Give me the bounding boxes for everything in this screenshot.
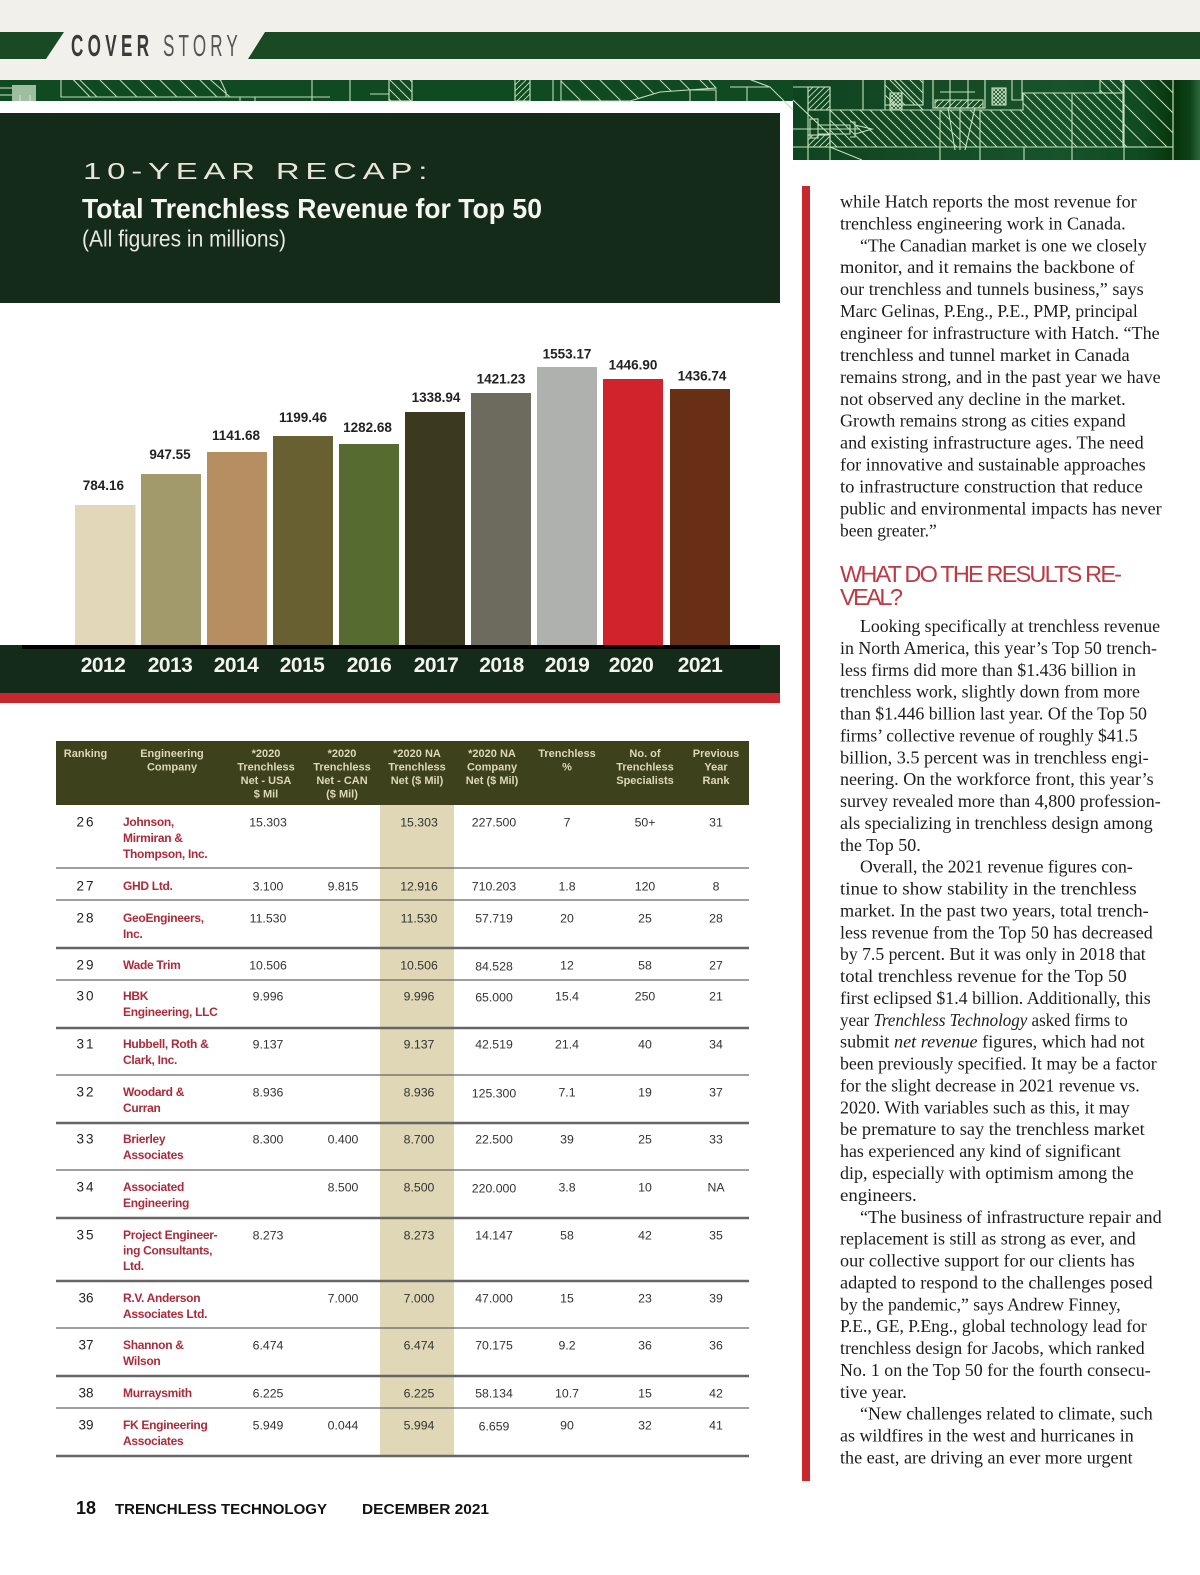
- row 27: 8: [713, 880, 720, 894]
- row 38: 6.225: [404, 1386, 435, 1400]
- section heading: [840, 561, 1122, 610]
- article text: results: in North America, this year’s Top 50 trench-: [840, 638, 1157, 658]
- row 35: Ltd.: [123, 1259, 144, 1273]
- article text: opening paragraphs: for innovative and sustainable approaches: [840, 455, 1146, 475]
- row 28: GeoEngineers,: [123, 911, 204, 925]
- row 38: 6.225: [253, 1386, 284, 1400]
- row 26: 15.303: [400, 816, 438, 830]
- row 33: 33: [709, 1132, 723, 1146]
- row 39: 0.044: [328, 1418, 359, 1432]
- table header: Net - USA: [241, 775, 291, 787]
- article text: results: No. 1 on the Top 50 for the fourth consecu-: [840, 1360, 1151, 1380]
- row 31: 9.137: [253, 1038, 284, 1052]
- row 38: 58.134: [475, 1386, 513, 1400]
- article text: results: our collective support for our clients has: [840, 1250, 1135, 1270]
- table header: *2020: [252, 748, 280, 760]
- value labels: 947.55: [149, 447, 191, 462]
- row 26: Mirmiran &: [123, 831, 183, 845]
- article text: results: Overall, the 2021 revenue figures con-: [860, 857, 1133, 877]
- row 35: 35: [709, 1228, 723, 1242]
- blueprint graphic: [0, 70, 1200, 160]
- panel title: Total Trenchless Revenue for Top 50: [82, 193, 542, 224]
- table header: Trenchless: [237, 761, 295, 773]
- article text: results: less firms did more than $1.436 billion in: [840, 660, 1136, 680]
- row 30: 9.996: [253, 990, 284, 1004]
- row 27: 9.815: [328, 880, 359, 894]
- article text: opening paragraphs: Marc Gelinas, P.Eng., P.E., PMP, principal: [840, 301, 1138, 321]
- row 29: 12: [560, 958, 574, 972]
- row 29: 10.506: [400, 958, 438, 972]
- value labels: 1199.46: [279, 410, 328, 425]
- row 30: 15.4: [555, 990, 579, 1004]
- row 35: [76, 1228, 723, 1273]
- row 32: Woodard &: [123, 1085, 185, 1099]
- table header: Trenchless: [388, 761, 446, 773]
- row 28: 28: [709, 912, 723, 926]
- row 34: 8.500: [328, 1180, 359, 1194]
- section banner: cover story: COVER: [71, 29, 149, 63]
- row rules: [56, 868, 749, 1456]
- table header: Trenchless: [313, 761, 371, 773]
- row 35: 58: [560, 1228, 574, 1242]
- row 36: 7.000: [404, 1292, 435, 1306]
- article text: opening paragraphs: monitor, and it remains the backbone of: [840, 257, 1135, 277]
- row 30: 21: [709, 990, 723, 1004]
- row 33: 8.300: [253, 1132, 284, 1146]
- article text: opening paragraphs: remains strong, and in the past year we have: [840, 367, 1161, 387]
- row 37: 36: [638, 1338, 652, 1352]
- table header: $ Mil: [254, 788, 278, 800]
- row 39: 6.659: [479, 1420, 510, 1434]
- panel subtitle: (All figures in millions): [82, 226, 286, 252]
- year labels: 2015: [280, 654, 325, 677]
- row 34: 34: [76, 1180, 96, 1194]
- row 33: [76, 1132, 723, 1162]
- year labels: 2013: [148, 654, 192, 677]
- article text: results: tinue to show stability in the trenchless: [840, 879, 1137, 899]
- row 30: HBK: [123, 989, 149, 1003]
- row 39: FK Engineering: [123, 1418, 207, 1432]
- row 33: Brierley: [123, 1132, 166, 1146]
- footer: TRENCHLESS TECHNOLOGY: [115, 1502, 327, 1518]
- row 31: 31: [76, 1036, 96, 1052]
- row 33: 39: [560, 1132, 574, 1146]
- rankings table: [56, 741, 749, 1456]
- value labels: [83, 346, 727, 493]
- bars: [75, 367, 730, 645]
- article text: results: than $1.446 billion last year. Of the Top 50: [840, 704, 1147, 724]
- axis band: [0, 645, 780, 693]
- row 35: 14.147: [475, 1228, 513, 1242]
- article text: opening paragraphs: public and environmental impacts has never: [840, 498, 1162, 518]
- table header: Net ($ Mil): [466, 775, 519, 787]
- article text: opening paragraphs: not observed any decline in the market.: [840, 389, 1126, 409]
- row 36: 39: [709, 1292, 723, 1306]
- section banner: cover story: STORY: [163, 29, 238, 63]
- row 32: Curran: [123, 1101, 161, 1115]
- row 38: [78, 1386, 723, 1400]
- article text: opening paragraphs: trenchless and tunnel market in Canada: [840, 345, 1130, 365]
- article text: results: total trenchless revenue for the Top 50: [840, 966, 1127, 986]
- article text: opening paragraphs: [840, 191, 1162, 540]
- row 32: 125.300: [472, 1086, 516, 1100]
- row 31: 42.519: [475, 1038, 513, 1052]
- article text: results: “The business of infrastructure repair and: [860, 1207, 1162, 1227]
- row 37: 6.474: [253, 1338, 284, 1352]
- table header: Previous: [693, 748, 739, 760]
- row 30: 250: [635, 990, 655, 1004]
- footer: DECEMBER 2021: [362, 1502, 489, 1518]
- article text: results: market. In the past two years, total trench-: [840, 900, 1149, 920]
- article text: results: neering. On the workforce front, this year’s: [840, 769, 1154, 789]
- article text: opening paragraphs: our trenchless and tunnels business,” says: [840, 279, 1144, 299]
- title panel: [0, 113, 780, 303]
- row 27: [76, 878, 720, 894]
- row 35: 42: [638, 1228, 652, 1242]
- row 36: 36: [78, 1290, 94, 1306]
- row 36: 23: [638, 1292, 652, 1306]
- row 27: GHD Ltd.: [123, 879, 173, 893]
- row 30: 30: [76, 988, 96, 1004]
- article text: results: P.E., GE, P.Eng., global technology lead for: [840, 1316, 1147, 1336]
- row 33: 8.700: [404, 1132, 435, 1146]
- row 27: 1.8: [558, 880, 576, 894]
- row 28: 57.719: [475, 912, 513, 926]
- article text: results: for the slight decrease in 2021 revenue vs.: [840, 1076, 1140, 1096]
- row 36: R.V. Anderson: [123, 1291, 200, 1305]
- row 39: 5.994: [404, 1418, 435, 1432]
- section heading: WHAT DO THE RESULTS RE-: [840, 561, 1122, 587]
- value labels: 1282.68: [343, 420, 392, 435]
- table header: Year: [704, 761, 728, 773]
- row 37: 6.474: [404, 1338, 435, 1352]
- row 27: 710.203: [472, 880, 516, 894]
- row 37: Shannon &: [123, 1338, 184, 1352]
- value labels: 1421.23: [477, 372, 526, 386]
- row 35: ing Consultants,: [123, 1243, 212, 1257]
- article text: results: less revenue from the Top 50 has decreased: [840, 922, 1153, 942]
- row 29: 58: [638, 958, 652, 972]
- table header: %: [562, 761, 572, 773]
- article text: results: by the pandemic,” says Andrew Finney,: [840, 1294, 1121, 1314]
- footer: 18: [76, 1498, 96, 1518]
- red column rule: [802, 186, 810, 1481]
- value labels: 1553.17: [543, 346, 591, 362]
- table header: Ranking: [64, 748, 107, 760]
- row 28: 20: [560, 912, 574, 926]
- article text: results: year Trenchless Technology asked firms to: [840, 1010, 1128, 1030]
- year labels: [81, 654, 723, 677]
- row 39: 39: [78, 1418, 94, 1432]
- row 35: 35: [76, 1228, 96, 1242]
- row 28: [76, 910, 723, 941]
- row 31: Clark, Inc.: [123, 1053, 177, 1067]
- row 32: 8.936: [404, 1086, 435, 1100]
- article text: results: firms’ collective revenue of roughly $41.5: [840, 725, 1138, 745]
- year labels: 2012: [81, 654, 125, 677]
- article text: results: submit net revenue figures, which had not: [840, 1032, 1145, 1052]
- article text: results: Looking specifically at trenchless revenue: [860, 616, 1160, 636]
- article text: opening paragraphs: engineer for infrastructure with Hatch. “The: [840, 323, 1160, 343]
- row 34: NA: [707, 1180, 725, 1194]
- row 32: 8.936: [253, 1086, 284, 1100]
- section banner: cover story: [0, 29, 1200, 63]
- row 28: 25: [638, 912, 652, 926]
- row 39: Associates: [123, 1434, 184, 1448]
- row 36: 7.000: [328, 1292, 359, 1306]
- article text: opening paragraphs: to infrastructure construction that reduce: [840, 477, 1143, 497]
- article text: opening paragraphs: trenchless engineering work in Canada.: [840, 213, 1126, 233]
- article text: results: trenchless work, slightly down from more: [840, 682, 1140, 702]
- row 26: 50+: [635, 816, 655, 830]
- row 39: 5.949: [253, 1418, 284, 1432]
- year labels: 2017: [414, 654, 458, 677]
- table header: Engineering: [140, 748, 204, 760]
- row 37: 9.2: [558, 1338, 576, 1352]
- article text: opening paragraphs: “The Canadian market is one we closely: [860, 235, 1147, 255]
- row 36: Associates Ltd.: [123, 1307, 207, 1321]
- article text: results: the east, are driving an ever more urgent: [840, 1447, 1133, 1467]
- row 35: 8.273: [253, 1228, 284, 1242]
- row 37: [78, 1338, 723, 1368]
- row 38: Murraysmith: [123, 1386, 192, 1400]
- row 34: Engineering: [123, 1196, 189, 1210]
- row 36: 47.000: [475, 1292, 513, 1306]
- article text: results: the Top 50.: [840, 835, 921, 855]
- row 28: 28: [76, 910, 96, 926]
- table header: *2020: [328, 748, 356, 760]
- value labels: 1338.94: [412, 390, 461, 405]
- article text: results: been previously specified. It may be a factor: [840, 1054, 1157, 1074]
- table header: Net ($ Mil): [391, 775, 444, 787]
- row 36: [78, 1290, 723, 1321]
- table header: Trenchless: [538, 748, 596, 760]
- row 26: 15.303: [249, 816, 287, 830]
- table header: No. of: [629, 748, 661, 760]
- row 26: 26: [76, 814, 96, 830]
- highlighted column: [380, 805, 454, 1456]
- row 39: 41: [709, 1418, 723, 1432]
- row 34: Associated: [123, 1180, 184, 1194]
- article text: results: by 7.5 percent. But it was only in 2018 that: [840, 944, 1146, 964]
- row 31: Hubbell, Roth &: [123, 1037, 209, 1051]
- row 33: 22.500: [475, 1132, 513, 1146]
- row 39: 32: [638, 1418, 652, 1432]
- row 29: 10.506: [249, 958, 287, 972]
- row 27: 120: [635, 880, 655, 894]
- row 33: 25: [638, 1132, 652, 1146]
- row 38: 42: [709, 1386, 723, 1400]
- article text: results: “New challenges related to climate, such: [860, 1404, 1153, 1424]
- table header: Company: [147, 761, 198, 773]
- row 27: 27: [76, 878, 96, 894]
- article text: results: as wildfires in the west and hurricanes in: [840, 1426, 1134, 1446]
- value labels: 1141.68: [212, 428, 261, 443]
- row 30: [76, 988, 723, 1019]
- article text: results: als specializing in trenchless design among: [840, 813, 1153, 833]
- row 28: 11.530: [401, 912, 438, 926]
- year labels: 2021: [678, 654, 723, 677]
- row 33: Associates: [123, 1148, 184, 1162]
- article text: results: adapted to respond to the challenges posed: [840, 1272, 1153, 1292]
- article text: results: replacement is still as strong as ever, and: [840, 1229, 1136, 1249]
- row 29: [76, 958, 723, 974]
- row 28: Inc.: [123, 927, 142, 941]
- table header: Trenchless: [616, 761, 674, 773]
- row 38: 10.7: [555, 1386, 579, 1400]
- row 28: 11.530: [250, 912, 287, 926]
- year labels: 2014: [214, 654, 259, 677]
- article text: results: first eclipsed $1.4 billion. Additionally, this: [840, 988, 1151, 1008]
- article text: results: billion, 3.5 percent was in trenchless engi-: [840, 747, 1149, 767]
- value labels: 1446.90: [609, 358, 657, 372]
- row 37: 37: [78, 1338, 94, 1352]
- year labels: 2018: [479, 654, 525, 677]
- row 29: 27: [709, 958, 723, 972]
- row 37: 36: [709, 1338, 723, 1352]
- row 32: 7.1: [558, 1086, 576, 1100]
- table header: Net - CAN: [316, 775, 368, 787]
- row 33: 0.400: [328, 1132, 359, 1146]
- article text: results: [840, 616, 1162, 1467]
- row 29: Wade Trim: [123, 958, 181, 972]
- value labels: 1436.74: [678, 368, 727, 384]
- article text: results: trenchless design for Jacobs, which ranked: [840, 1338, 1145, 1358]
- row 26: [76, 814, 723, 861]
- article text: opening paragraphs: Growth remains strong as cities expand: [840, 411, 1126, 431]
- row 26: 7: [564, 816, 571, 830]
- row 36: 15: [560, 1292, 574, 1306]
- row 26: 227.500: [472, 816, 516, 830]
- row 30: 65.000: [475, 990, 513, 1004]
- row 32: 32: [76, 1084, 96, 1100]
- page header background: [0, 0, 1200, 80]
- table header: Company: [467, 761, 518, 773]
- article text: results: 2020. With variables such as this, it may: [840, 1097, 1130, 1117]
- value labels: 784.16: [83, 478, 125, 493]
- row 30: 9.996: [404, 990, 435, 1004]
- row 29: 29: [76, 958, 96, 972]
- footer: [76, 1498, 489, 1518]
- table header: [56, 741, 749, 805]
- article text: results: dip, especially with optimism among the: [840, 1163, 1134, 1183]
- bar chart: total revenue 2012-2021: [0, 346, 780, 703]
- section heading: VEAL?: [840, 584, 903, 610]
- year labels: 2016: [347, 654, 391, 677]
- row 35: Project Engineer-: [123, 1228, 218, 1242]
- row 34: 3.8: [558, 1180, 576, 1194]
- article text: opening paragraphs: while Hatch reports the most revenue for: [840, 191, 1137, 211]
- row 32: 37: [709, 1086, 723, 1100]
- row 31: 21.4: [555, 1038, 579, 1052]
- table header: *2020 NA: [468, 748, 516, 760]
- row 30: Engineering, LLC: [123, 1005, 218, 1019]
- row 26: Johnson,: [123, 815, 174, 829]
- row 38: 38: [78, 1386, 94, 1400]
- row 31: 9.137: [404, 1038, 435, 1052]
- row 29: 84.528: [475, 960, 513, 974]
- row 26: Thompson, Inc.: [123, 847, 207, 861]
- table header: Rank: [703, 775, 730, 787]
- eyebrow: 10-year recap: 10-YEAR RECAP:: [83, 158, 427, 185]
- row 39: 90: [560, 1418, 574, 1432]
- row 32: 19: [638, 1086, 652, 1100]
- article text: results: be premature to say the trenchless market: [840, 1119, 1145, 1139]
- row 31: 40: [638, 1038, 652, 1052]
- article text: results: survey revealed more than 4,800 profession-: [840, 791, 1161, 811]
- row 33: 33: [76, 1132, 96, 1146]
- row 34: 220.000: [472, 1182, 516, 1196]
- year labels: 2019: [545, 654, 589, 677]
- row 26: 31: [709, 816, 723, 830]
- article text: results: has experienced any kind of significant: [840, 1141, 1121, 1161]
- table header: *2020 NA: [393, 748, 441, 760]
- row 32: [76, 1084, 723, 1115]
- row 34: 8.500: [404, 1180, 435, 1194]
- row 34: 10: [638, 1180, 652, 1194]
- row 38: 15: [638, 1386, 652, 1400]
- row 27: 12.916: [400, 880, 438, 894]
- row 37: Wilson: [123, 1354, 160, 1368]
- row 35: 8.273: [404, 1228, 435, 1242]
- row 37: 70.175: [475, 1338, 513, 1352]
- article text: opening paragraphs: and existing infrastructure ages. The need: [840, 433, 1144, 453]
- article text: results: tive year.: [840, 1382, 907, 1402]
- table header: ($ Mil): [326, 788, 358, 800]
- year labels: 2020: [609, 654, 653, 677]
- row 34: [76, 1180, 725, 1210]
- article text: opening paragraphs: been greater.”: [840, 520, 937, 540]
- row 31: 34: [709, 1038, 723, 1052]
- table header: Specialists: [616, 775, 674, 787]
- row 31: [76, 1036, 723, 1067]
- row 39: [78, 1418, 723, 1448]
- row 27: 3.100: [253, 880, 284, 894]
- article text: results: engineers.: [840, 1185, 917, 1205]
